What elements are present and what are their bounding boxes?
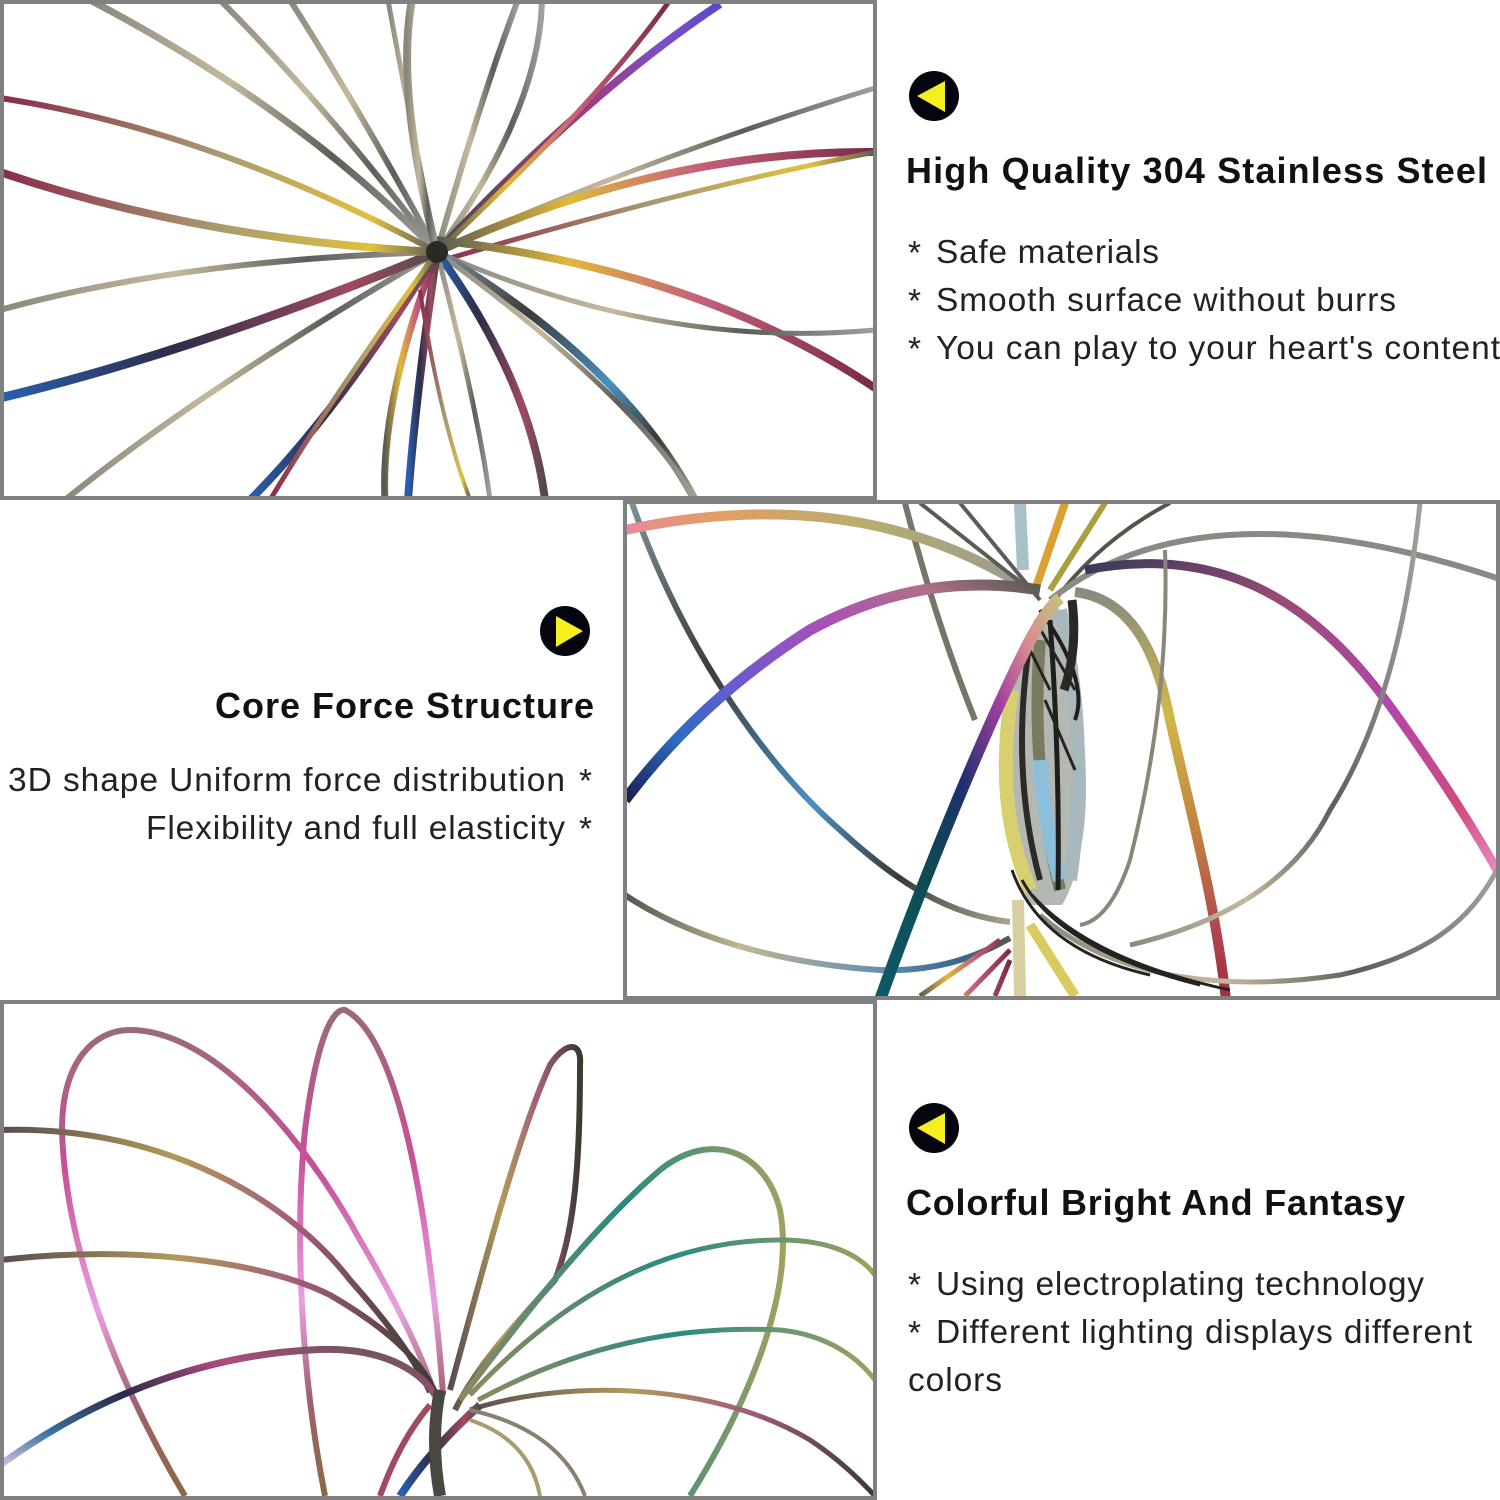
flow ring arches <box>0 1010 875 1496</box>
flow ring spokes seen from above <box>0 0 875 500</box>
bullet list: core force: * <box>579 763 592 800</box>
bullet list: colors: Using electroplating technology <box>936 1266 1424 1303</box>
icon: left arrow button <box>909 1103 959 1153</box>
bullet list: stainless steel: * <box>908 331 921 368</box>
heading: High Quality 304 Stainless Steel: High Quality 304 Stainless Steel <box>906 150 1487 191</box>
panel: middle text block <box>8 606 594 848</box>
bullet list: stainless steel: Safe materials <box>936 234 1159 271</box>
heading: Core Force Structure: Core Force Structure <box>215 685 594 726</box>
bullet list: core force: Flexibility and full elasticity <box>146 810 565 847</box>
panel: middle photo <box>625 502 1498 1000</box>
twisted core <box>1001 600 1230 996</box>
flow ring side view <box>625 503 1497 1000</box>
bullet list: core force: 3D shape Uniform force distribution <box>8 762 565 799</box>
bullet list: stainless steel: * <box>908 235 921 272</box>
bullet list: core force <box>8 762 592 848</box>
panel: bottom text block <box>906 1103 1473 1399</box>
bullet list: stainless steel: * <box>908 283 921 320</box>
bullet list: colors: colors <box>908 1362 1002 1399</box>
bullet list: stainless steel: Smooth surface without burrs <box>936 282 1396 319</box>
bullet list: colors: * <box>908 1267 921 1304</box>
heading: Colorful Bright And Fantasy: Colorful Bright And Fantasy <box>906 1182 1405 1223</box>
panel: top text block <box>906 71 1500 368</box>
bullet list: colors <box>908 1266 1473 1399</box>
bullet list: stainless steel: You can play to your heart's content <box>936 330 1500 367</box>
panel: bottom photo <box>0 1002 875 1498</box>
icon: left arrow button <box>909 71 959 121</box>
bullet list: stainless steel <box>908 234 1500 368</box>
panel: top photo <box>0 0 875 500</box>
icon: right arrow button <box>540 606 590 656</box>
bullet list: core force: * <box>579 811 592 848</box>
bullet list: colors: * <box>908 1315 921 1352</box>
bullet list: colors: Different lighting displays different <box>936 1314 1473 1351</box>
